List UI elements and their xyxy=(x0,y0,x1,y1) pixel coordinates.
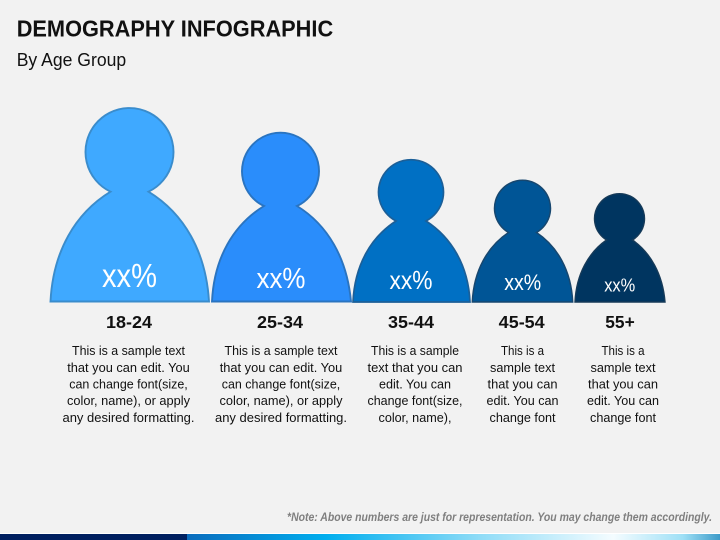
panel: age group 25-34 xyxy=(212,133,351,425)
icon: person 45-54 xyxy=(472,180,573,302)
icon: person 35-44 xyxy=(353,160,470,302)
description 55+ xyxy=(587,343,659,425)
description 45-54: edit. You can xyxy=(486,393,558,408)
panel: age group 18-24 xyxy=(50,108,209,425)
description 55+: This is a xyxy=(602,343,645,358)
description 18-24: that you can edit. You xyxy=(67,360,190,375)
subtitle: By Age Group xyxy=(17,50,126,70)
label 18-24: 18-24 xyxy=(106,312,152,332)
description 18-24: can change font(size, xyxy=(69,376,188,392)
label 45-54: 45-54 xyxy=(499,312,545,332)
value 35-44: xx% xyxy=(390,265,432,295)
label 35-44: 35-44 xyxy=(388,312,434,332)
description 45-54 xyxy=(486,343,558,425)
description 55+: edit. You can xyxy=(587,393,659,408)
panel: age group 35-44 xyxy=(353,160,470,425)
value 18-24: xx% xyxy=(102,257,157,294)
description 45-54: sample text xyxy=(490,360,555,375)
description 35-44: edit. You can xyxy=(379,376,451,392)
description 25-34: any desired formatting. xyxy=(215,410,347,425)
description 45-54: change font xyxy=(490,410,556,425)
icon: person 55+ xyxy=(575,194,665,302)
footer bar xyxy=(0,533,720,540)
panel: age group 45-54 xyxy=(472,180,573,425)
description 25-34: This is a sample text xyxy=(224,343,338,358)
description 35-44: color, name), xyxy=(378,410,452,425)
description 35-44 xyxy=(368,343,462,425)
description 25-34: that you can edit. You xyxy=(220,360,342,375)
value 45-54: xx% xyxy=(504,270,541,295)
description 25-34: can change font(size, xyxy=(222,376,340,392)
description 55+: change font xyxy=(590,410,656,425)
description 45-54: This is a xyxy=(501,343,545,358)
description 55+: that you can xyxy=(588,376,658,392)
description 25-34 xyxy=(215,343,347,425)
icon: person 18-24 xyxy=(50,108,209,302)
icon: person 25-34 xyxy=(212,133,351,302)
description 18-24: color, name), or apply xyxy=(67,393,191,408)
description 35-44: text that you can xyxy=(368,360,462,375)
description 18-24 xyxy=(62,343,194,425)
value 55+: xx% xyxy=(604,276,635,296)
title: DEMOGRAPHY INFOGRAPHIC xyxy=(17,16,333,42)
value 25-34: xx% xyxy=(256,263,306,295)
description 18-24: This is a sample text xyxy=(72,343,185,358)
label 55+: 55+ xyxy=(605,312,635,332)
description 45-54: that you can xyxy=(488,376,558,392)
label 25-34: 25-34 xyxy=(257,312,303,332)
description 18-24: any desired formatting. xyxy=(62,410,194,425)
description 35-44: change font(size, xyxy=(368,393,462,408)
description 55+: sample text xyxy=(590,360,656,375)
description 25-34: color, name), or apply xyxy=(220,393,343,408)
panel: age group 55+ xyxy=(575,194,665,425)
description 35-44: This is a sample xyxy=(371,343,459,358)
